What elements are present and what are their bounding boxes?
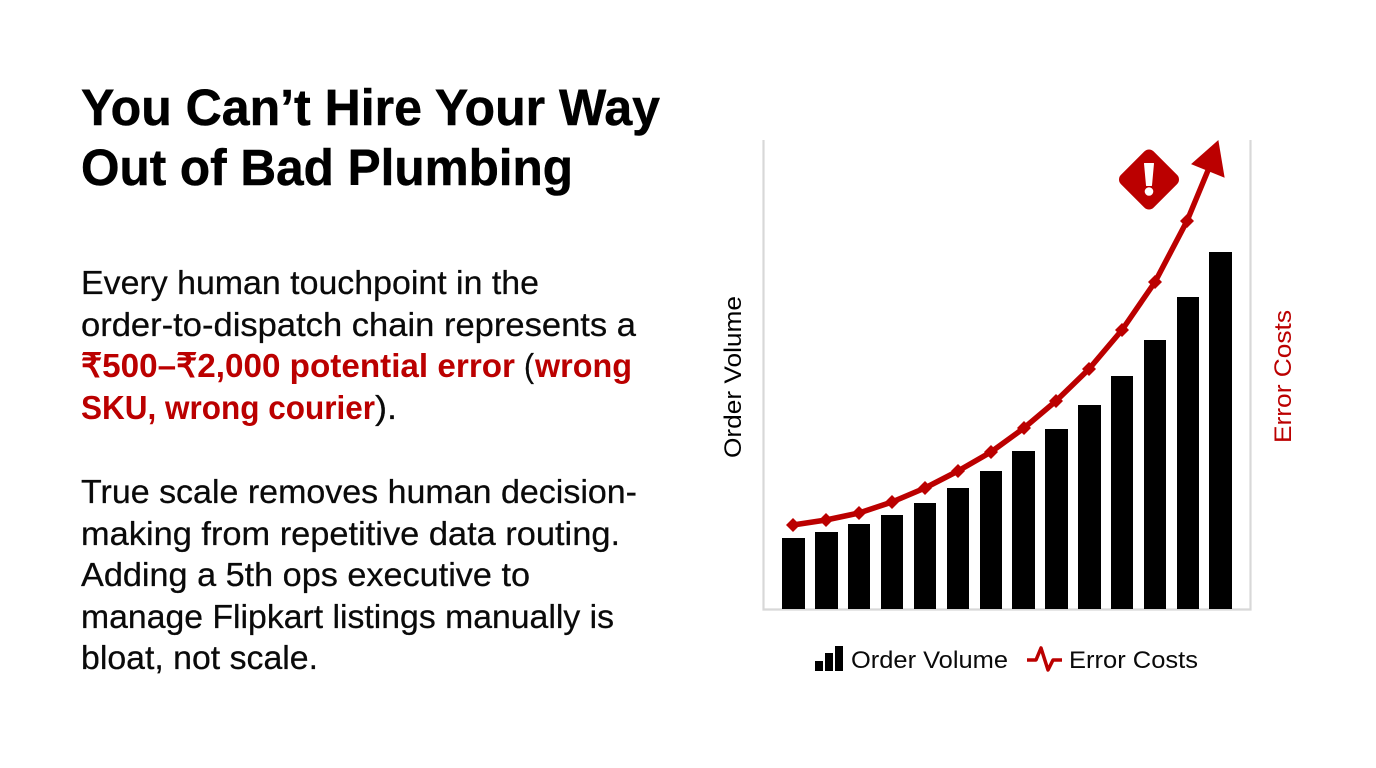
chart: order volume vs error costs: [720, 140, 1297, 674]
legend icon: bars: [815, 646, 843, 671]
chart axes frame: [764, 140, 1250, 610]
right axis label: Error Costs: [1270, 310, 1297, 443]
legend label: order volume: Order Volume: [851, 647, 1008, 674]
text block: error cost paragraph: [81, 265, 636, 427]
line: error costs: [793, 168, 1209, 525]
text block: error cost paragraph: Every human touchpoint in the: [81, 265, 539, 302]
left axis label: Order Volume: [720, 296, 747, 458]
text block: error cost paragraph: (: [524, 348, 534, 385]
text block: error cost paragraph: SKU, wrong courier: [81, 390, 375, 427]
text block: error cost paragraph: wrong: [534, 348, 632, 385]
title: [81, 79, 661, 196]
line markers: [786, 214, 1194, 532]
text block: true scale paragraph: manage Flipkart listings manually is: [81, 599, 614, 636]
text block: true scale paragraph: bloat, not scale.: [81, 640, 318, 677]
text block: error cost paragraph: ₹500–₹2,000 potential error: [81, 348, 515, 385]
text block: error cost paragraph: ).: [375, 390, 397, 427]
title: You Can’t Hire Your Way: [81, 79, 661, 136]
text block: true scale paragraph: making from repetitive data routing.: [81, 516, 620, 553]
bars: order volume: [782, 252, 1232, 609]
text block: true scale paragraph: True scale removes human decision-: [81, 474, 637, 511]
text block: true scale paragraph: [81, 474, 637, 677]
legend icon: pulse line: [1027, 648, 1062, 670]
text block: error cost paragraph: order-to-dispatch chain represents a: [81, 307, 636, 344]
legend: [815, 646, 1198, 674]
title: Out of Bad Plumbing: [81, 139, 573, 196]
arrowhead: [1192, 141, 1224, 177]
legend label: error costs: Error Costs: [1069, 647, 1198, 674]
icon: warning diamond: [1126, 156, 1172, 203]
text block: true scale paragraph: Adding a 5th ops executive to: [81, 557, 530, 594]
